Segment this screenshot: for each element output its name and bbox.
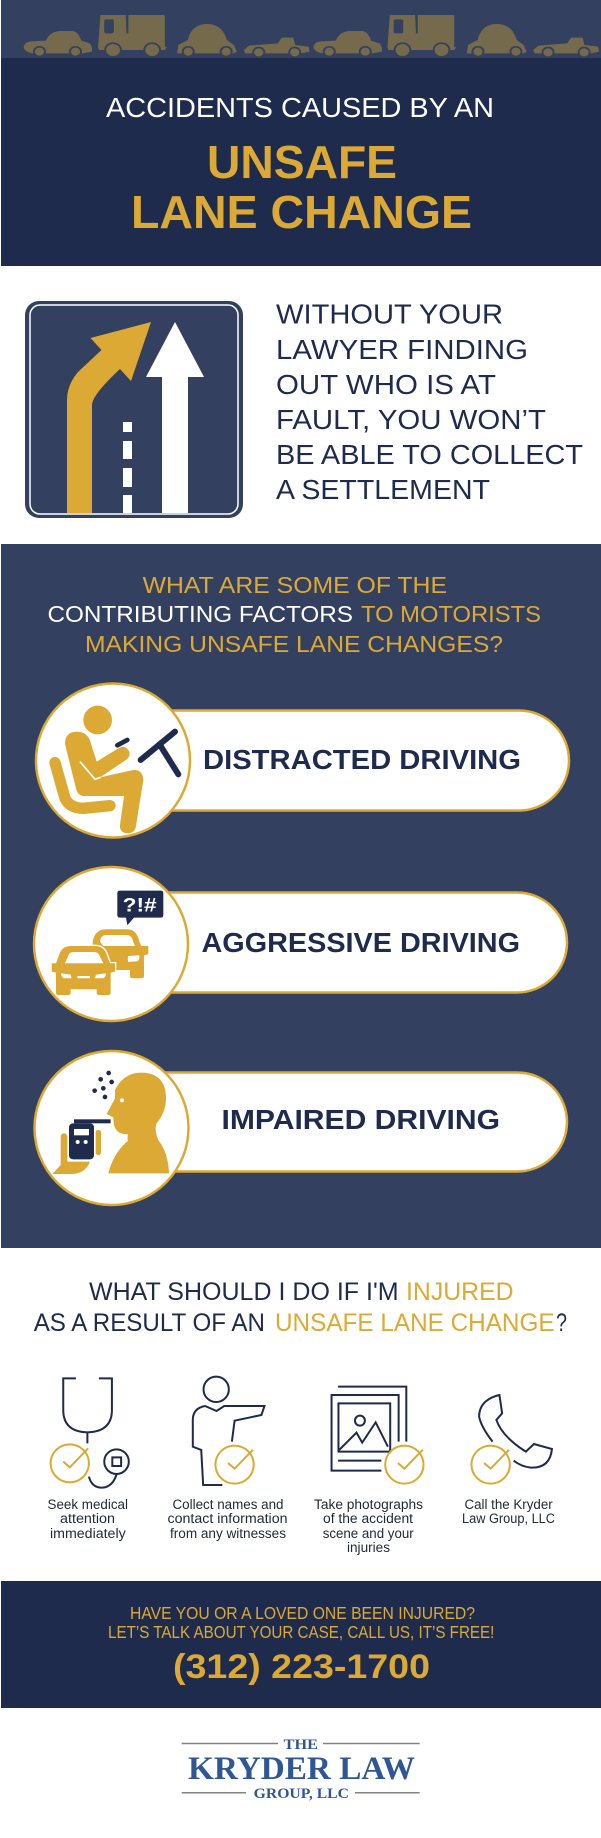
- icon: photographs: [332, 1387, 424, 1484]
- factor: distracted driving: DISTRACTED DRIVING: [203, 744, 521, 775]
- label: seek medical: Seek medical: [48, 1497, 128, 1512]
- icon: witness pointing: [193, 1377, 264, 1485]
- step labels: [48, 1497, 555, 1555]
- intro text: FAULT, YOU WON’T: [276, 404, 546, 435]
- label: call the firm: [462, 1497, 555, 1526]
- label: collect names: [168, 1497, 288, 1541]
- label: collect names: Collect names and: [172, 1497, 284, 1512]
- steps heading: WHAT SHOULD I DO IF I'M: [89, 1278, 399, 1306]
- title emphasis: LANE CHANGE: [131, 186, 472, 238]
- intro text: OUT WHO IS AT: [276, 369, 496, 400]
- label: seek medical: immediately: [50, 1526, 126, 1541]
- icon: distracted driver: [55, 706, 178, 833]
- sedan: [24, 31, 92, 57]
- factors heading: TO MOTORISTS: [361, 601, 541, 627]
- factors heading: CONTRIBUTING FACTORS: [48, 601, 353, 627]
- sports car: [244, 38, 310, 58]
- sports car 2: [533, 38, 599, 58]
- steps heading: ?: [556, 1309, 567, 1337]
- car strip: [1, 0, 601, 58]
- label: take photographs: scene and your: [323, 1526, 414, 1541]
- sedan 2: [314, 31, 382, 57]
- icon: lane change road sign: [25, 301, 243, 518]
- intro text: WITHOUT YOUR: [276, 298, 503, 330]
- factor: impaired driving: IMPAIRED DRIVING: [222, 1104, 500, 1135]
- steps heading: [34, 1278, 567, 1337]
- intro text: BE ABLE TO COLLECT: [276, 439, 583, 470]
- factor: aggressive driving: AGGRESSIVE DRIVING: [202, 927, 520, 958]
- intro text: [276, 298, 583, 505]
- title line: ACCIDENTS CAUSED BY AN: [106, 92, 494, 123]
- label: take photographs: [314, 1497, 423, 1555]
- beetle 2: [467, 24, 527, 57]
- label: collect names: contact information: [168, 1511, 288, 1526]
- beetle: [177, 24, 237, 57]
- factors heading: MAKING UNSAFE LANE CHANGES?: [85, 631, 503, 657]
- panel: contributing factors: [1, 544, 601, 1248]
- step icons: [51, 1377, 552, 1488]
- steps heading: INJURED: [406, 1278, 514, 1306]
- title emphasis: [131, 136, 472, 238]
- icon: breathalyzer test: [52, 1071, 169, 1174]
- label: seek medical: attention: [60, 1511, 115, 1526]
- truck 2: [388, 15, 456, 58]
- factors heading: WHAT ARE SOME OF THE: [143, 572, 447, 598]
- title emphasis: UNSAFE: [207, 136, 397, 188]
- intro text: LAWYER FINDING: [276, 334, 528, 365]
- logo: [182, 1737, 420, 1802]
- logo: KRYDER LAW: [188, 1751, 415, 1787]
- label: collect names: from any witnesses: [170, 1526, 286, 1541]
- call to action panel: [1, 1581, 601, 1708]
- logo: THE: [284, 1737, 318, 1753]
- factor: distracted driving: [36, 684, 569, 838]
- phone number: (312) 223-1700: [173, 1648, 430, 1686]
- label: seek medical: [48, 1497, 128, 1541]
- icon: telephone: [471, 1395, 552, 1484]
- call to action panel: LET’S TALK ABOUT YOUR CASE, CALL US, IT’S FREE!: [108, 1622, 494, 1642]
- label: take photographs: injuries: [347, 1540, 390, 1555]
- label: call the firm: Law Group, LLC: [462, 1511, 555, 1526]
- label: take photographs: of the accident: [323, 1511, 413, 1526]
- factors heading: [48, 572, 541, 657]
- truck: [98, 15, 167, 58]
- factor: impaired driving: [34, 1051, 567, 1205]
- icon: stethoscope: [51, 1378, 129, 1488]
- factor: aggressive driving: [34, 867, 567, 1021]
- label: call the firm: Call the Kryder: [464, 1497, 553, 1512]
- label: take photographs: Take photographs: [314, 1497, 423, 1512]
- intro text: A SETTLEMENT: [276, 474, 490, 505]
- icon: cars with angry speech bubble: ?!#: [123, 896, 157, 917]
- logo: GROUP, LLC: [254, 1786, 349, 1802]
- steps heading: UNSAFE LANE CHANGE: [275, 1309, 555, 1337]
- steps heading: AS A RESULT OF AN: [34, 1309, 265, 1337]
- header panel: [1, 0, 601, 266]
- call to action panel: HAVE YOU OR A LOVED ONE BEEN INJURED?: [130, 1603, 475, 1623]
- icon: cars with angry speech bubble: [52, 891, 163, 995]
